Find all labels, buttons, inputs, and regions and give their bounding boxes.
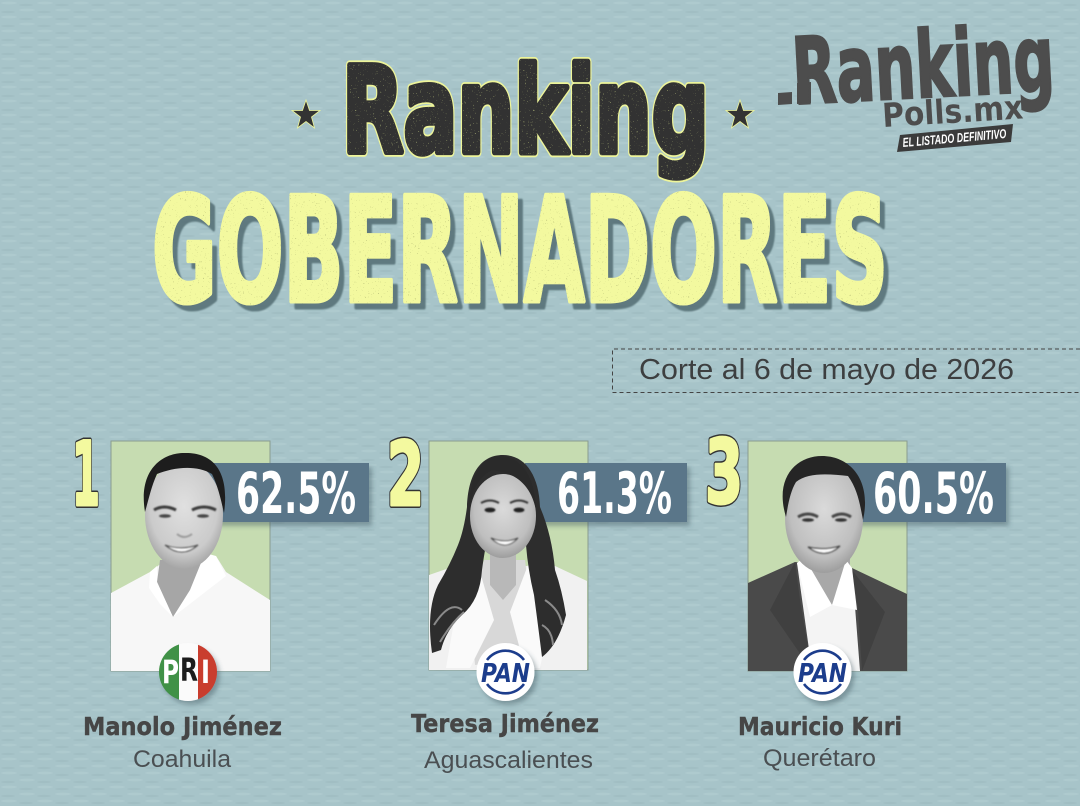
percentage bar 60.5%: 60.5% [873,461,994,527]
portrait: Mauricio Kuri [748,456,907,671]
percentage bar 62.5%: 62.5% [236,461,356,527]
rank number 3 [705,421,743,524]
title: Ranking [342,43,709,181]
title: Ranking: Ranking [342,43,709,181]
badge: PRI [159,643,218,701]
rank number 2: 2 [387,423,424,526]
date cutoff box: Corte al 6 de mayo de 2026 [639,354,1014,386]
name: Mauricio Kuri: Mauricio Kuri [738,712,902,741]
badge: PAN [794,643,852,701]
state: Coahuila: Coahuila [133,746,232,773]
panel: candidate 2 [411,441,687,774]
date cutoff box [612,349,1080,392]
badge: PRI: R [180,651,198,689]
panel: candidate 3 [738,441,1006,772]
portrait background [748,441,907,671]
icon: left star [292,100,320,128]
rank number 3: 3 [705,421,743,524]
text: 1 [72,423,100,526]
icon: right star [726,100,754,128]
panel: candidate 1 [83,441,369,773]
logo tagline band: EL LISTADO DEFINITIVO [902,126,1007,150]
title: Ranking: Ranking [342,43,709,181]
badge: PRI: P [162,653,179,691]
logo word Polls.mx: Polls.mx [881,87,1024,135]
name: Manolo Jiménez: Manolo Jiménez [83,712,282,741]
portrait background [429,441,588,670]
state: Aguascalientes: Aguascalientes [424,747,593,774]
portrait: Manolo Jiménez [111,453,270,671]
percentage bar 60.5% [845,461,1006,527]
badge: PRI: I [201,653,210,691]
percentage bar 61.3% [525,461,687,527]
logo dot bars [778,82,811,105]
badge: PAN [476,643,534,701]
portrait: Teresa Jiménez [429,455,587,670]
name: Teresa Jiménez: Teresa Jiménez [411,709,599,738]
logo tagline band [897,124,1013,152]
rank number 3: 3 [705,421,743,524]
rank number 2: 2 [387,423,424,526]
state: Querétaro: Querétaro [763,745,876,772]
percentage bar 62.5% [205,461,369,527]
portrait background [111,441,270,671]
badge: PAN: PAN [481,659,530,689]
logo: Ranking Polls.mx [778,5,1057,152]
rank number 2 [387,423,424,526]
rank number 1 [72,423,100,526]
percentage bar 61.3%: 61.3% [557,461,672,527]
text: 1 [72,423,100,526]
badge: PAN: PAN [798,659,847,689]
